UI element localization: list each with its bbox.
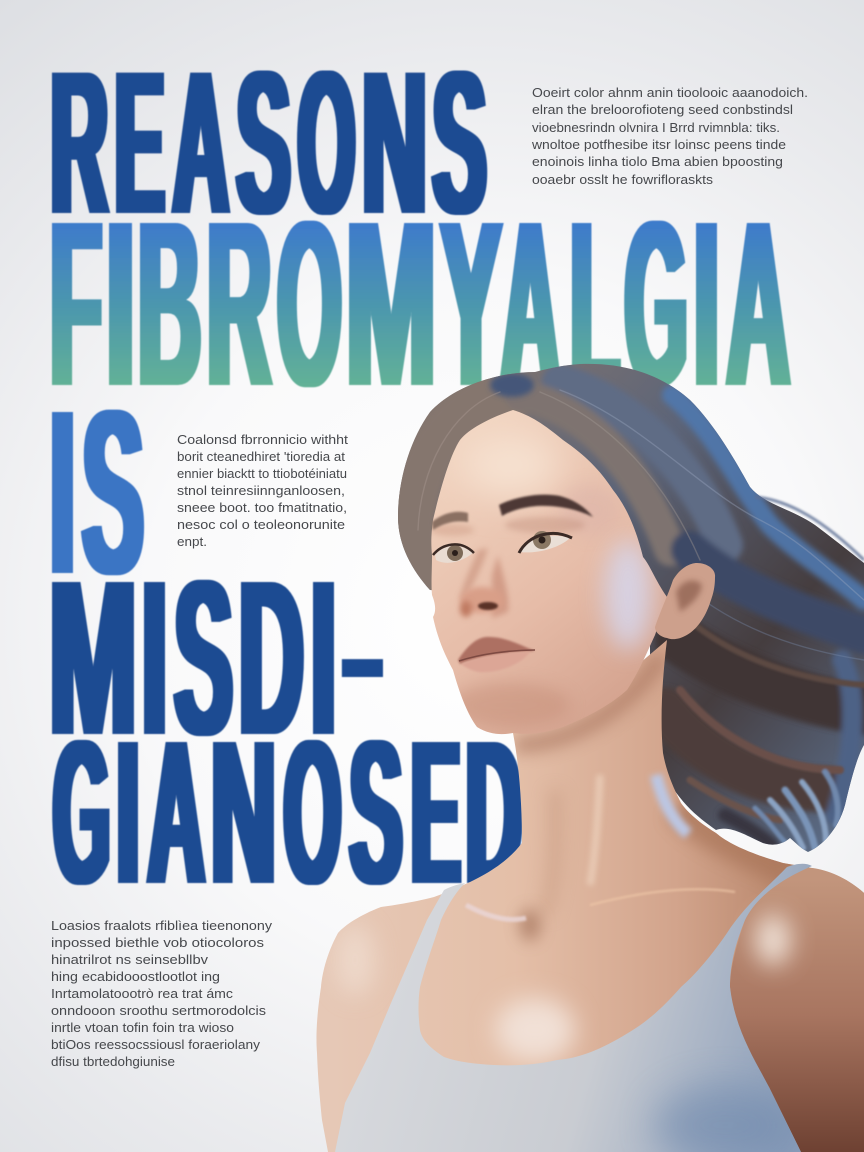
title line: FIBROMYALGIA: L (571, 172, 619, 435)
text block: top right: Ooeirt color ahnm anin tioolooic aaanodoich. (532, 86, 808, 100)
title line: FIBROMYALGIA: A (501, 172, 560, 435)
title: S (82, 361, 144, 623)
text block: top right: elran the breloorofioteng seed conbstindsl (532, 103, 793, 117)
face (431, 410, 667, 734)
title line: GIANOSED: S (350, 698, 402, 927)
text block: bottom left: hing ecabidooostlootlot ing (51, 970, 220, 984)
title line: REASONS: O (298, 29, 355, 257)
illustration: woman (310, 355, 864, 1152)
right eyebrow (499, 495, 593, 517)
title line: MISDI: S (174, 534, 233, 781)
title line: IS: I (50, 361, 75, 623)
title line: GIANOSED: I (116, 698, 140, 927)
title line: FIBROMYALGIA: B (138, 172, 201, 435)
ear (655, 563, 715, 639)
title (49, 29, 790, 927)
title: D (466, 698, 522, 927)
title line: FIBROMYALGIA: I (694, 172, 719, 435)
title line: FIBROMYALGIA: F (50, 172, 102, 435)
title hyphen: - (341, 571, 384, 739)
left eye (433, 544, 474, 563)
text block: top right: enoinois linha tiolo Bma abien bpoosting (532, 155, 783, 169)
text block: top right (531, 86, 808, 187)
text block: middle left: Coalonsd fbrronnicio withht (177, 433, 349, 447)
text block: middle left: enpt. (177, 535, 207, 549)
text block: middle left: ennier biacktt to ttiobotéiniatu (177, 467, 347, 481)
text block: bottom left (51, 919, 273, 1069)
text block: bottom left: hinatrilrot ns seinsebllbv (51, 953, 209, 967)
text block: bottom left: Loasios fraalots rfiblìea tieenonony (51, 919, 273, 933)
nose (460, 548, 508, 618)
title line: GIANOSED: N (211, 698, 276, 927)
hair: wispy strand (755, 497, 864, 560)
text block: middle left (177, 433, 349, 549)
title line: FIBROMYALGIA: I (106, 172, 135, 435)
title line: GIANOSED: E (411, 698, 460, 927)
title line: FIBROMYALGIA: O (278, 172, 341, 435)
text block: bottom left: inpossed biethle vob otiocoloros (51, 936, 264, 950)
title line: REASONS: R (51, 29, 108, 257)
hair: full mass (390, 355, 864, 865)
title line: GIANOSED: G (53, 698, 110, 927)
text block: bottom left: Inrtamolatoootrò rea trat ámc (51, 987, 233, 1001)
title line: REASONS: S (237, 29, 290, 257)
text block: bottom left: dfisu tbrtedohgiunise (51, 1055, 175, 1069)
text block: top right: ooaebr osslt he fowrifloraskts (532, 173, 713, 187)
lips (458, 637, 535, 672)
text block: top right: wnoltoe potfhesibe itsr loinsc peens tinde (531, 138, 786, 152)
tank top (330, 860, 820, 1152)
left eyebrow (432, 512, 468, 530)
shoulder highlight (755, 914, 791, 966)
title line: MISDI: M (49, 534, 137, 781)
title line: MISDI: I (142, 534, 167, 781)
title: S (433, 29, 486, 257)
title: I (311, 534, 336, 781)
text block: bottom left: inrtle vtoan tofin foin tra wioso (51, 1021, 234, 1035)
title line: REASONS: E (115, 29, 164, 257)
title line: FIBROMYALGIA: G (625, 172, 687, 435)
ear inner shadow (676, 581, 702, 612)
title line: GIANOSED: A (148, 698, 205, 927)
text block: middle left: nesoc col o teoleonorunite (177, 518, 345, 532)
neck and torso skin (310, 630, 864, 1152)
face shading (430, 433, 652, 727)
text block: bottom left: onndooon sroothu sertmorodolcis (51, 1004, 266, 1018)
title line: REASONS: A (173, 29, 229, 257)
right arm (730, 867, 864, 1152)
title line: GIANOSED: O (284, 698, 341, 927)
title line: REASONS: N (362, 29, 427, 257)
right eye (519, 531, 572, 553)
text block: bottom left: btiOos reessocssiousl foraeriolany (51, 1038, 261, 1052)
title line: FIBROMYALGIA: M (346, 172, 436, 435)
title line: FIBROMYALGIA: Y (441, 172, 501, 435)
text block: top right: vioebnesrindn olvnira I Brrd rvimnbla: tiks. (532, 121, 780, 135)
text block: middle left: borit cteanedhiret 'tioredia at (177, 450, 346, 464)
text block: middle left: stnol teinresiinnganloosen, (177, 484, 345, 498)
title line: FIBROMYALGIA: R (207, 172, 271, 435)
title line: MISDI: D (239, 534, 304, 781)
text block: middle left: sneee boot. too fmatitnatio, (177, 501, 347, 515)
